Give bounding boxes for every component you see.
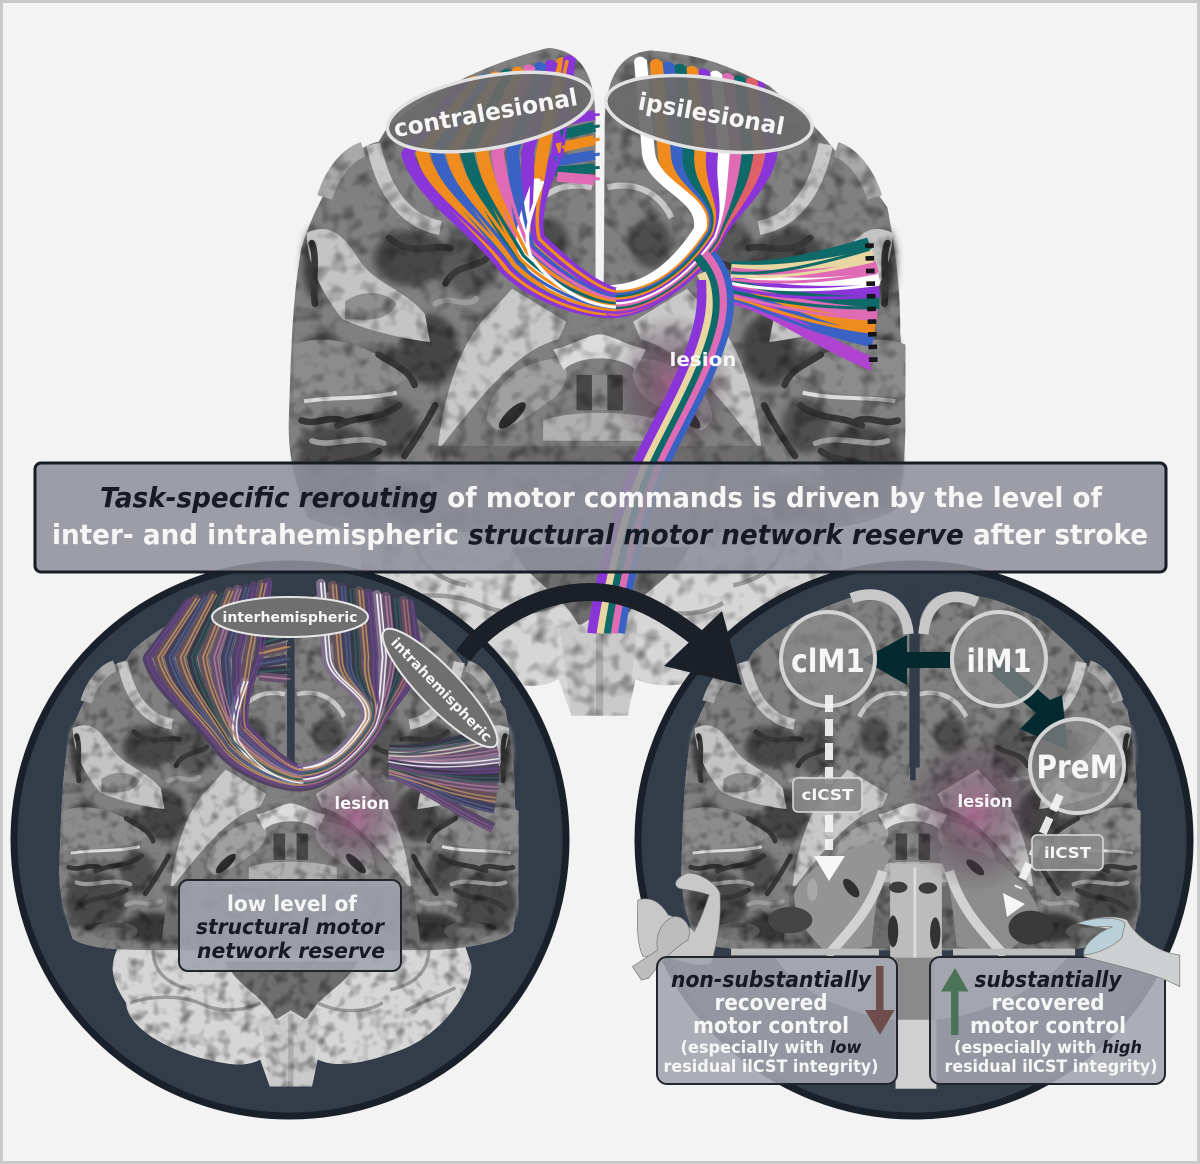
title banner	[35, 463, 1166, 572]
label: ipsilesional: ipsilesional	[636, 87, 787, 141]
dashed arrow: PreM to ilCST	[1003, 795, 1060, 917]
left panel: low structural reserve	[14, 564, 566, 1116]
node: ilM1: ilM1	[966, 642, 1032, 680]
label: intrahemispheric	[370, 617, 510, 759]
title banner: Task-specific rerouting of motor commands is driven by the level of	[100, 481, 1103, 514]
brain slice	[59, 591, 519, 1086]
label: interhemispheric: interhemispheric	[222, 610, 358, 626]
arrow: ilM1 to clM1	[862, 635, 950, 685]
icon: arm with impaired hand	[632, 873, 720, 980]
node: clM1	[781, 612, 875, 706]
panel: non-substantially recovered: non-substantially	[671, 967, 872, 993]
panel: non-substantially recovered	[657, 957, 897, 1084]
node: PreM: PreM	[1036, 748, 1118, 786]
panel: substantially recovered: recovered	[992, 990, 1104, 1016]
motor fibre tracts	[407, 59, 879, 633]
panel: substantially recovered: residual ilCST integrity)	[944, 1057, 1158, 1077]
callout: low level of reserve: network reserve	[197, 939, 385, 964]
panel: substantially recovered: motor control	[970, 1013, 1126, 1039]
panel: non-substantially recovered: residual ilCST integrity)	[664, 1057, 878, 1077]
icon: hand with pinch grip	[1077, 917, 1180, 987]
panel: non-substantially recovered: (especially with low	[680, 1038, 862, 1058]
label: contralesional	[381, 58, 599, 166]
callout: low level of reserve: structural motor	[196, 915, 385, 940]
node: ilM1	[952, 612, 1046, 706]
label: contralesional: contralesional	[392, 83, 580, 143]
label: lesion: lesion	[334, 794, 390, 813]
label: ilCST	[1032, 835, 1103, 870]
panel: non-substantially recovered: motor control	[693, 1013, 849, 1039]
dashed arrow: clM1 to clCST	[814, 695, 845, 881]
panel: substantially recovered: (especially with high	[954, 1038, 1142, 1058]
lesion glow	[298, 759, 414, 875]
label: intrahemispheric: intrahemispheric	[387, 635, 495, 745]
panel: non-substantially recovered: recovered	[714, 990, 828, 1016]
brain slice	[289, 48, 905, 716]
thin tracts	[147, 582, 499, 831]
title banner: inter- and intrahemispheric structural motor network reserve after stroke	[52, 518, 1148, 551]
right panel: rerouting and outcome	[632, 564, 1190, 1116]
label: clCST: clCST	[802, 786, 854, 804]
label: ilCST: ilCST	[1044, 844, 1091, 862]
label: interhemispheric	[212, 597, 368, 637]
curved arrow between panels	[463, 592, 742, 685]
callout: low level of reserve: low level of	[227, 892, 358, 917]
label: lesion: lesion	[670, 349, 736, 371]
arrow: decrease	[865, 966, 894, 1035]
brain slice	[681, 591, 1141, 1089]
lesion glow	[903, 732, 1047, 892]
arrow: ilM1 to PreM	[985, 655, 1068, 750]
node: clM1: clM1	[791, 642, 865, 680]
label: ipsilesional	[601, 64, 817, 164]
circle background	[638, 564, 1190, 1116]
label: clCST	[793, 778, 862, 812]
lesion glow	[610, 313, 734, 457]
callout: low level of reserve	[179, 880, 401, 971]
circle background	[14, 564, 566, 1116]
label: lesion: lesion	[958, 792, 1012, 811]
node: PreM	[1030, 719, 1124, 813]
panel: substantially recovered: substantially	[974, 967, 1123, 993]
arrow: increase	[941, 968, 968, 1035]
central brain with tractography	[289, 48, 905, 716]
panel: substantially recovered	[930, 957, 1165, 1084]
